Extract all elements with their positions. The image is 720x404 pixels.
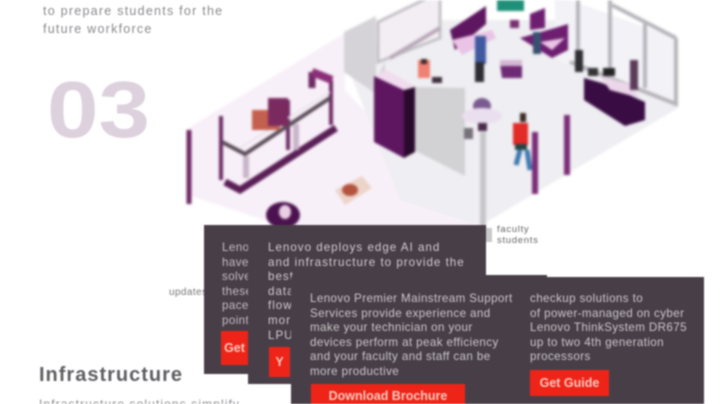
card 3 right text: Lenovo ThinkSystem DR675 [530, 321, 687, 334]
section number: 03 [47, 65, 150, 154]
back wall and windows [344, 0, 676, 104]
panel: card 3 [291, 277, 704, 404]
card 3 right text: checkup solutions to [530, 292, 643, 305]
card 3 left text: make your technician on your [310, 321, 473, 334]
label: updates: updates [169, 287, 207, 298]
partition and cabinet [374, 70, 465, 176]
card 3 download button: Download Brochure [329, 389, 447, 403]
panel: card 1 [204, 225, 486, 374]
label: faculty and students: students [497, 235, 539, 246]
intro text: future workforce [43, 22, 153, 36]
card 3 left text: Lenovo Premier Mainstream Support [310, 292, 513, 305]
card 3 right text: of power-managed on cyber [530, 307, 684, 320]
card 3 right text [530, 292, 687, 364]
pole and kiosk [462, 98, 502, 236]
card 2 button [269, 347, 290, 377]
card 2 text: and infrastructure to provide the [268, 256, 465, 269]
panel: card 2 extension [486, 275, 547, 285]
card 3 left text: devices perform at peak efficiency [310, 336, 499, 349]
card 1 text: have [222, 256, 249, 269]
card 3 left text: and your faculty and staff can be [310, 350, 491, 363]
floor [188, 20, 678, 232]
label: faculty and students [496, 224, 539, 246]
card 1 button: Get [224, 341, 245, 355]
card 3 left text [310, 292, 513, 378]
card 1 text [222, 241, 262, 328]
reception desk right [584, 60, 645, 126]
card 3 left text: more productive [310, 365, 399, 378]
card 2 button: Y [275, 355, 284, 369]
intro text [42, 4, 223, 36]
card 3 right text: processors [530, 350, 591, 363]
panel: card 2 [248, 225, 486, 384]
card 3 left text: Services provide experience and [310, 307, 491, 320]
card 2 text [268, 241, 465, 342]
card 2 text: Lenovo deploys edge AI and [268, 241, 440, 254]
icon: bunk furniture left [189, 72, 336, 204]
card 3 right text: up to two 4th generation [530, 336, 664, 349]
card 3 download button [311, 384, 465, 404]
card 2 text: data [268, 285, 295, 298]
card 3 guide button [530, 370, 609, 396]
card 3 guide button: Get Guide [540, 376, 599, 390]
card 1 text: solve [222, 270, 251, 283]
person in red shirt [513, 113, 530, 170]
label: faculty and students: faculty [497, 224, 529, 235]
intro text: to prepare students for the [43, 4, 223, 18]
card 2 text: flow [268, 299, 293, 312]
lounge area top [450, 0, 583, 82]
person with laptop [418, 59, 442, 83]
card 1 text: point [222, 314, 249, 327]
card 2 text: more [268, 314, 298, 327]
card 1 text: Lenovo [222, 241, 262, 254]
card 1 text: pace [222, 299, 249, 312]
heading: infrastructure: Infrastructure [39, 364, 183, 386]
icon: faculty marker [484, 228, 492, 242]
card 1 button [221, 331, 248, 365]
card 2 text: best [268, 270, 294, 283]
card 2 text: LPU [268, 329, 294, 342]
card 1 text: these [222, 285, 252, 298]
purple posts [532, 115, 570, 194]
people and seating left [252, 98, 372, 228]
